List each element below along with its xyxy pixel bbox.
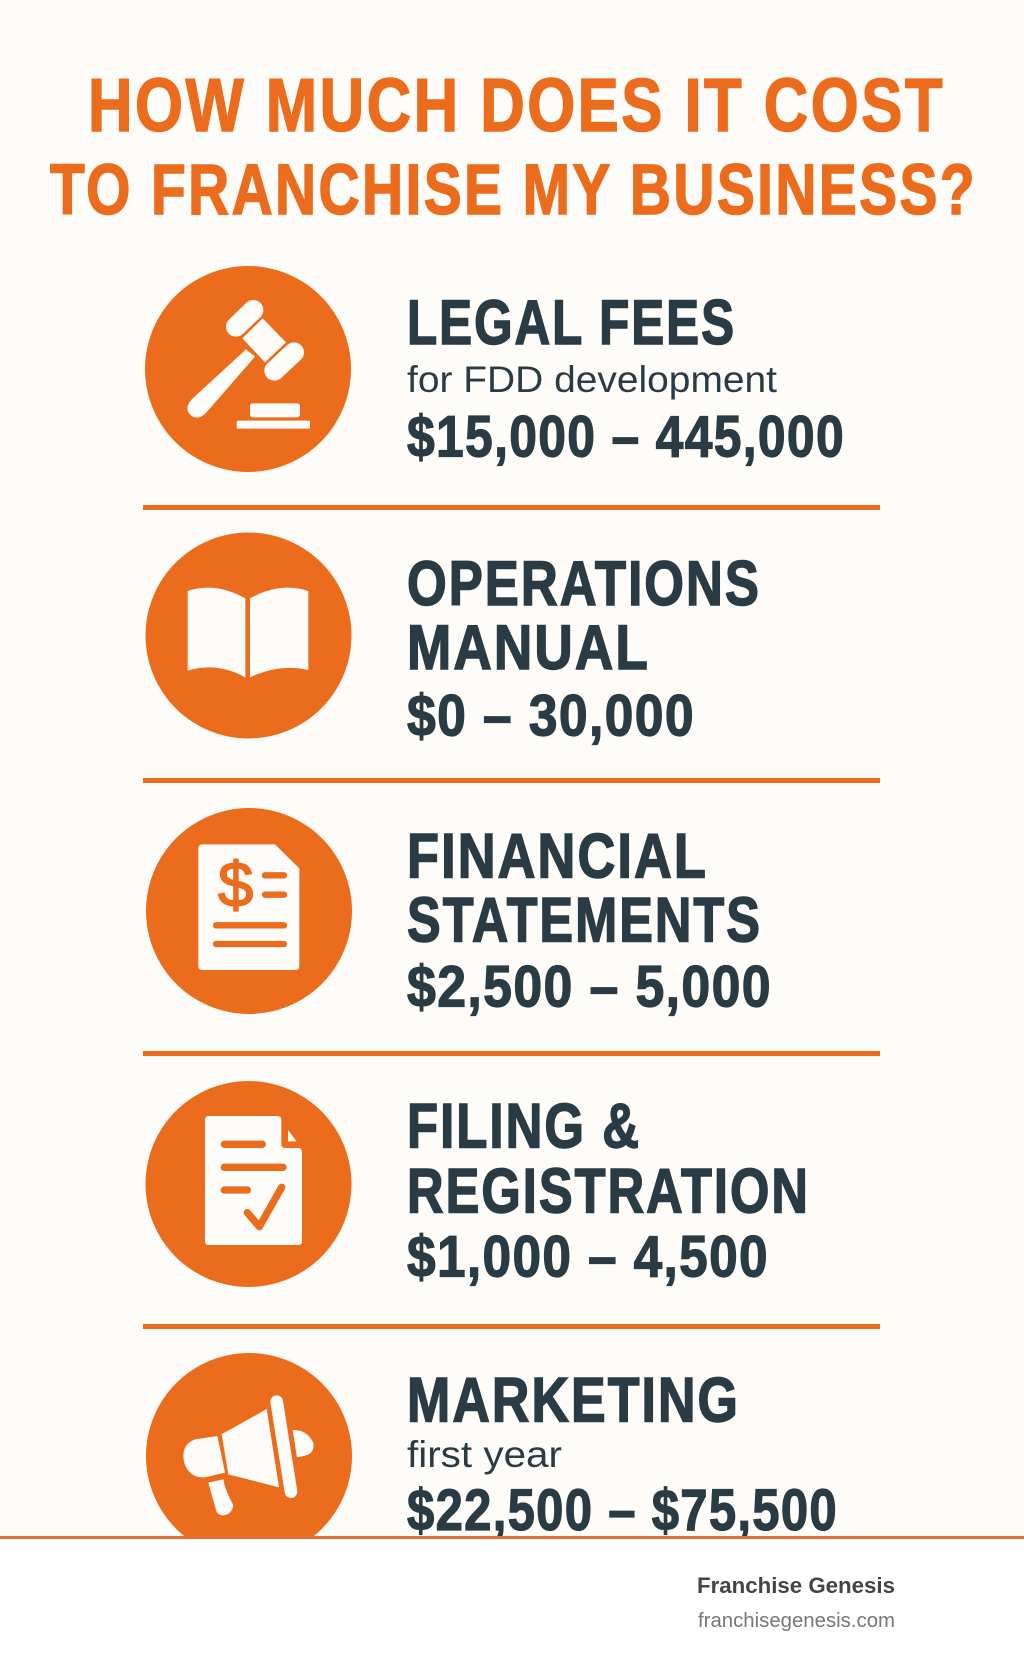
heading: legal fees: LEGAL FEES	[407, 288, 736, 358]
price: legal fees: $15,000 – 445,000	[407, 404, 845, 470]
footer brand name: Franchise Genesis	[697, 1573, 895, 1598]
text: for FDD development: for FDD development	[407, 359, 778, 400]
icon: financial document: $	[218, 851, 253, 921]
panel: legal fees	[145, 266, 845, 472]
title	[50, 63, 977, 230]
icon: financial document	[146, 808, 352, 1014]
heading: filing and registration: REGISTRATION	[407, 1156, 810, 1226]
heading: filing and registration	[407, 1092, 810, 1226]
text: first year: first year	[407, 1434, 562, 1475]
price: marketing: $22,500 – $75,500	[407, 1478, 838, 1543]
heading: financial statements: FINANCIAL	[407, 822, 708, 892]
price: financial statements: $2,500 – 5,000	[407, 954, 772, 1020]
icon: gavel	[145, 266, 351, 472]
panel: operations manual	[146, 532, 761, 748]
heading: filing and registration: FILING &	[407, 1092, 641, 1162]
icon: checked document	[146, 1081, 352, 1287]
heading: marketing: MARKETING	[407, 1366, 740, 1436]
footer	[0, 1536, 1024, 1666]
panel: filing and registration	[146, 1081, 810, 1290]
icon: open book	[146, 532, 352, 738]
panel: financial statements	[146, 808, 772, 1020]
footer website: franchisegenesis.com	[698, 1610, 895, 1632]
panel: marketing	[146, 1353, 838, 1559]
price: filing and registration: $1,000 – 4,500	[407, 1224, 769, 1290]
heading: operations manual: MANUAL	[407, 613, 650, 683]
icon: megaphone	[146, 1353, 352, 1559]
price: operations manual: $0 – 30,000	[407, 684, 695, 748]
heading: financial statements	[407, 822, 762, 956]
heading: operations manual	[407, 549, 761, 683]
heading: operations manual: OPERATIONS	[407, 549, 761, 619]
heading: financial statements: STATEMENTS	[407, 886, 762, 956]
